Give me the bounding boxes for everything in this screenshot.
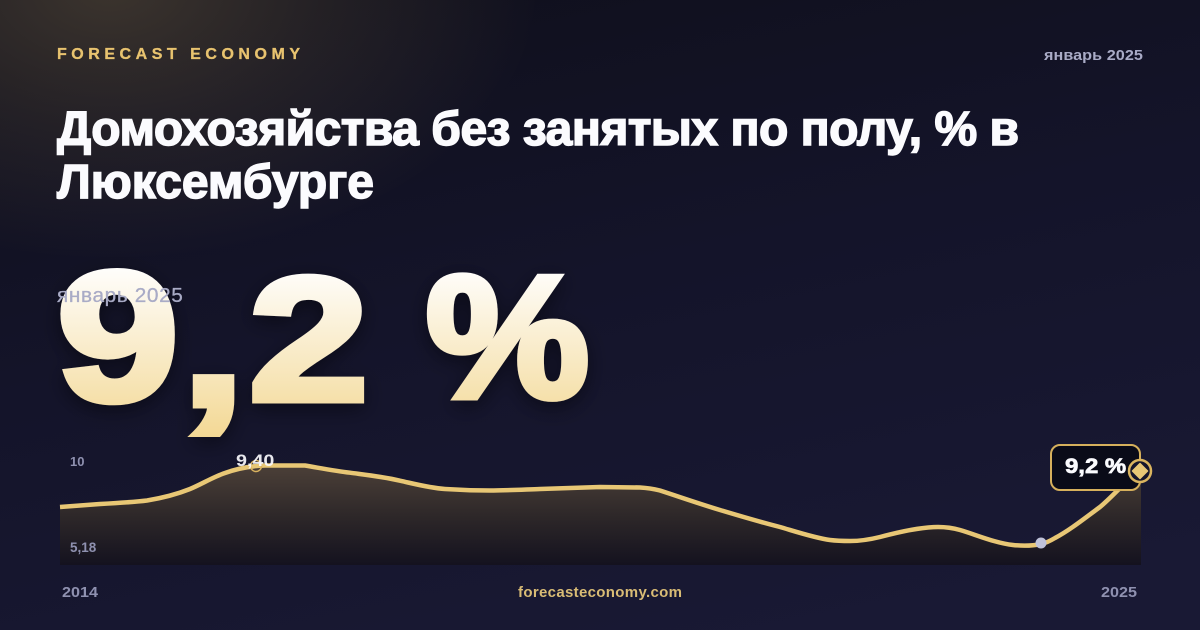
callout: 9,2 % xyxy=(1065,454,1126,478)
min marker xyxy=(1036,538,1046,548)
current value marker xyxy=(1129,460,1151,482)
axis label: 5,18: 5,18 xyxy=(70,540,97,555)
x axis end year: 2025 xyxy=(1101,585,1137,601)
title: Домохозяйства без занятых по полу, % в xyxy=(57,103,1019,156)
callout xyxy=(1051,445,1140,490)
x axis start year: 2014 xyxy=(62,585,98,601)
big value xyxy=(57,234,589,445)
chart line xyxy=(60,466,1141,546)
title: Люксембурге xyxy=(57,156,374,209)
big value: 9 xyxy=(57,234,179,439)
brand label: FORECAST ECONOMY xyxy=(57,46,300,63)
big value: 2 xyxy=(249,240,368,438)
axis label: 10: 10 xyxy=(70,454,84,469)
chart area fill xyxy=(60,466,1141,565)
footer site: forecasteconomy.com xyxy=(518,584,682,601)
title xyxy=(57,103,1019,209)
big value: , xyxy=(181,240,245,445)
big value: % xyxy=(426,239,589,434)
date top right: январь 2025 xyxy=(1044,48,1143,64)
date overlapping value: январь 2025 xyxy=(57,285,183,307)
max marker xyxy=(250,460,262,472)
max value label: 9,40 xyxy=(236,450,274,470)
area chart xyxy=(60,466,1141,565)
